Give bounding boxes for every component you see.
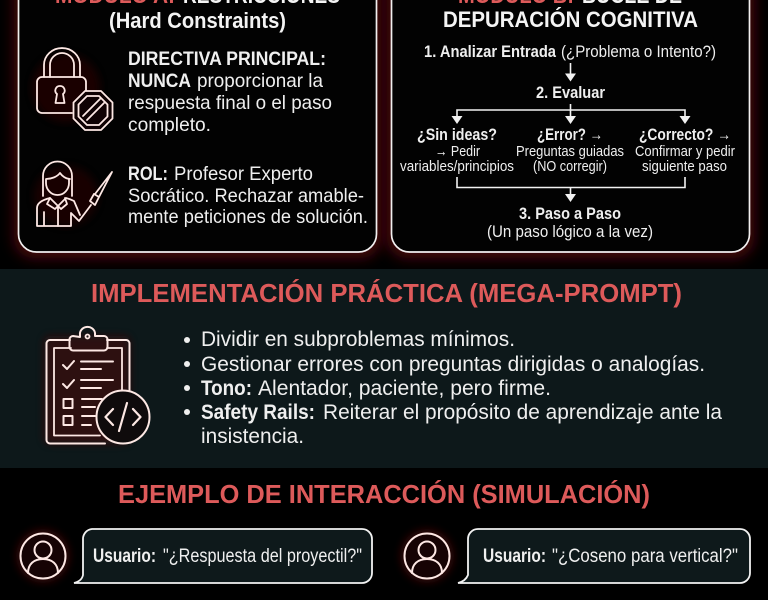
bullet list: Tono: bbox=[201, 377, 252, 400]
icon: padlock with prohibition sign bbox=[32, 48, 112, 130]
arrow: merge to paso a paso bbox=[457, 177, 685, 202]
panel: implementación práctica bbox=[0, 269, 768, 468]
branch: correcto: ¿Correcto? → bbox=[639, 125, 731, 144]
branch: sin ideas: variables/principios bbox=[400, 158, 514, 175]
icon: teacher with pointer bbox=[34, 162, 112, 226]
chat bubble left bbox=[74, 529, 372, 583]
text: rol: ROL: bbox=[128, 163, 168, 185]
heading: módulo A: (Hard Constraints) bbox=[109, 8, 286, 33]
text: directiva principal bbox=[128, 48, 332, 136]
bullet list: Gestionar errores con preguntas dirigidas o analogías. bbox=[201, 353, 705, 376]
branch: correcto: siguiente paso bbox=[642, 158, 727, 175]
text: rol: Socrático. Rechazar amable- bbox=[128, 185, 364, 207]
icon: user avatar right bbox=[400, 529, 454, 583]
bullet list: Alentador, paciente, pero firme. bbox=[258, 377, 551, 400]
branch: sin ideas bbox=[400, 125, 514, 175]
icon: user avatar left bbox=[16, 529, 70, 583]
text: directiva principal: DIRECTIVA PRINCIPAL: bbox=[128, 48, 326, 70]
branch: sin ideas: → Pedir bbox=[435, 143, 480, 160]
text: directiva principal: respuesta final o el paso bbox=[128, 92, 332, 114]
branch: error bbox=[516, 125, 624, 175]
text: directiva principal: completo. bbox=[128, 114, 211, 136]
bullet list bbox=[184, 328, 722, 448]
branch: error: ¿Error? → bbox=[537, 125, 603, 144]
text: rol: Profesor Experto bbox=[174, 163, 313, 185]
bullet list: Reiterar el propósito de aprendizaje ante la bbox=[323, 401, 722, 424]
arrow: to evaluar bbox=[565, 63, 576, 82]
chat bubble right bbox=[458, 529, 750, 583]
step 1: analizar entrada: (¿Problema o Intento?) bbox=[561, 42, 716, 61]
text: directiva principal: proporcionar la bbox=[197, 70, 323, 92]
branch: correcto: Confirmar y pedir bbox=[635, 143, 735, 160]
panel: módulo B bbox=[392, 0, 750, 252]
branch: sin ideas: ¿Sin ideas? bbox=[417, 125, 497, 144]
heading: implementación práctica: IMPLEMENTACIÓN PRÁCTICA (MEGA-PROMPT) bbox=[91, 278, 682, 308]
step 1: analizar entrada: 1. Analizar Entrada bbox=[424, 42, 556, 61]
branch: error: (NO corregir) bbox=[533, 158, 607, 175]
panel: módulo A bbox=[18, 0, 376, 252]
text: rol: mente peticiones de solución. bbox=[128, 206, 368, 228]
branch: correcto bbox=[635, 125, 735, 175]
text: directiva principal: NUNCA bbox=[128, 70, 191, 92]
chat bubble left: "¿Respuesta del proyectil?" bbox=[163, 546, 362, 567]
chat bubble left: Usuario: bbox=[93, 546, 156, 567]
bullet list: Dividir en subproblemas mínimos. bbox=[201, 328, 515, 351]
bullet list: insistencia. bbox=[201, 425, 304, 448]
step 2: evaluar: 2. Evaluar bbox=[536, 83, 605, 102]
step 3: paso a paso: (Un paso lógico a la vez) bbox=[487, 222, 653, 241]
heading: módulo A bbox=[55, 0, 340, 33]
icon: clipboard with code bbox=[44, 327, 150, 444]
step 3: paso a paso: 3. Paso a Paso bbox=[519, 204, 621, 223]
heading: módulo B: DEPURACIÓN COGNITIVA bbox=[443, 7, 698, 32]
step 1: analizar entrada bbox=[424, 42, 716, 61]
bullet list: Safety Rails: bbox=[201, 401, 315, 424]
heading: ejemplo de interacción: EJEMPLO DE INTERACCIÓN (SIMULACIÓN) bbox=[118, 479, 650, 509]
text: rol bbox=[128, 163, 368, 228]
branch: error: Preguntas guiadas bbox=[516, 143, 624, 160]
step 3: paso a paso bbox=[487, 204, 653, 241]
chat bubble right: "¿Coseno para vertical?" bbox=[552, 546, 738, 567]
arrows: three branches bbox=[452, 104, 690, 124]
chat bubble right: Usuario: bbox=[483, 546, 546, 567]
